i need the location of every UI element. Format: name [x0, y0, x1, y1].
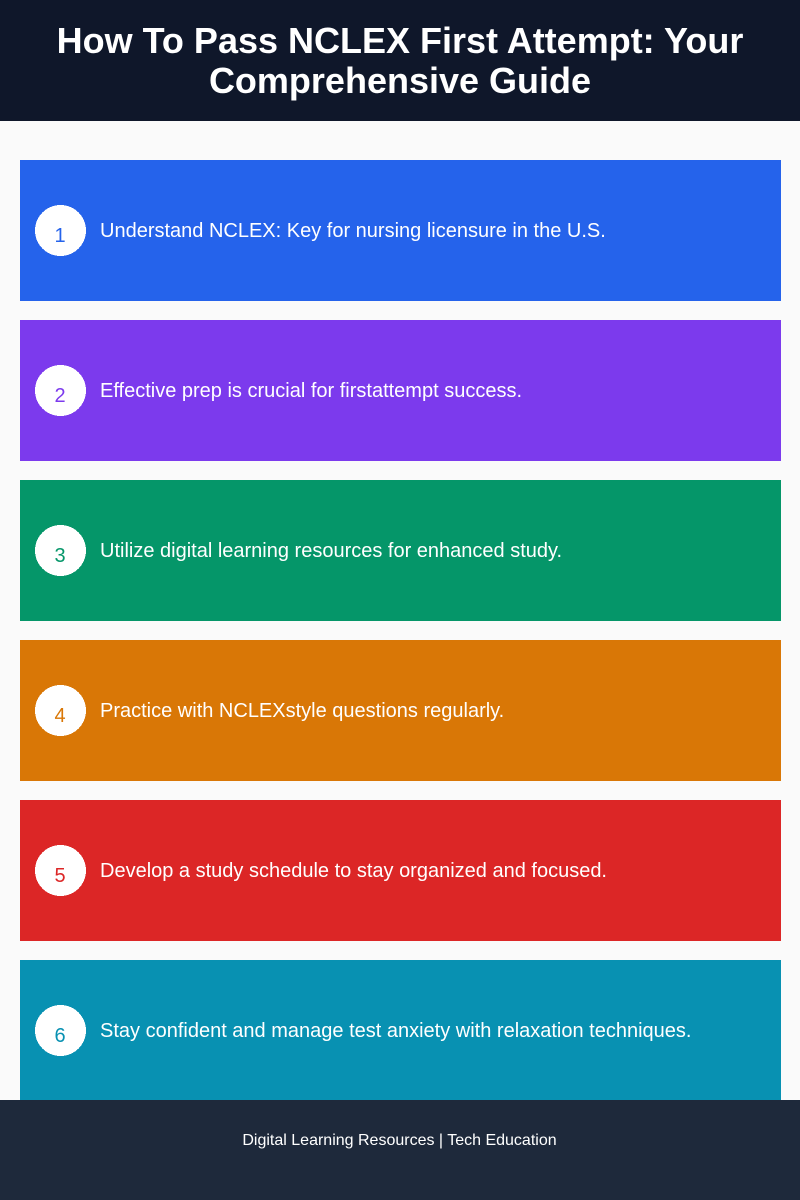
step 5 text: Develop a study schedule to stay organized and focused.	[100, 860, 607, 882]
step 6 text: Stay confident and manage test anxiety with relaxation techniques.	[100, 1020, 691, 1042]
icon: number 2 badge	[35, 365, 86, 416]
panel: step 4	[20, 640, 781, 781]
icon: number 6 badge	[35, 1005, 86, 1056]
icon: number 3 badge: 3	[54, 545, 66, 567]
icon: number 2 badge: 2	[54, 385, 66, 407]
footer text: Digital Learning Resources | Tech Education	[242, 1132, 557, 1149]
step 1 text: Understand NCLEX: Key for nursing licensure in the U.S.	[100, 220, 606, 242]
step 3 text: Utilize digital learning resources for enhanced study.	[100, 540, 562, 562]
icon: number 1 badge: 1	[54, 225, 66, 247]
title: How To Pass NCLEX First Attempt: Your	[57, 20, 743, 61]
icon: number 4 badge	[35, 685, 86, 736]
panel: step 6	[20, 960, 781, 1101]
panel: step 2	[20, 320, 781, 461]
icon: number 1 badge	[35, 205, 86, 256]
icon: number 5 badge	[35, 845, 86, 896]
title: Comprehensive Guide	[209, 60, 591, 101]
icon: number 4 badge: 4	[54, 705, 66, 727]
panel: header	[0, 0, 800, 121]
icon: number 3 badge	[35, 525, 86, 576]
title	[57, 20, 743, 101]
icon: number 6 badge: 6	[54, 1025, 66, 1047]
step 2 text: Effective prep is crucial for firstattempt success.	[100, 380, 522, 402]
step 4 text: Practice with NCLEXstyle questions regularly.	[100, 700, 504, 722]
icon: number 5 badge: 5	[54, 865, 66, 887]
panel: step 5	[20, 800, 781, 941]
panel: footer	[0, 1100, 800, 1200]
panel: step 1	[20, 160, 781, 301]
panel: step 3	[20, 480, 781, 621]
